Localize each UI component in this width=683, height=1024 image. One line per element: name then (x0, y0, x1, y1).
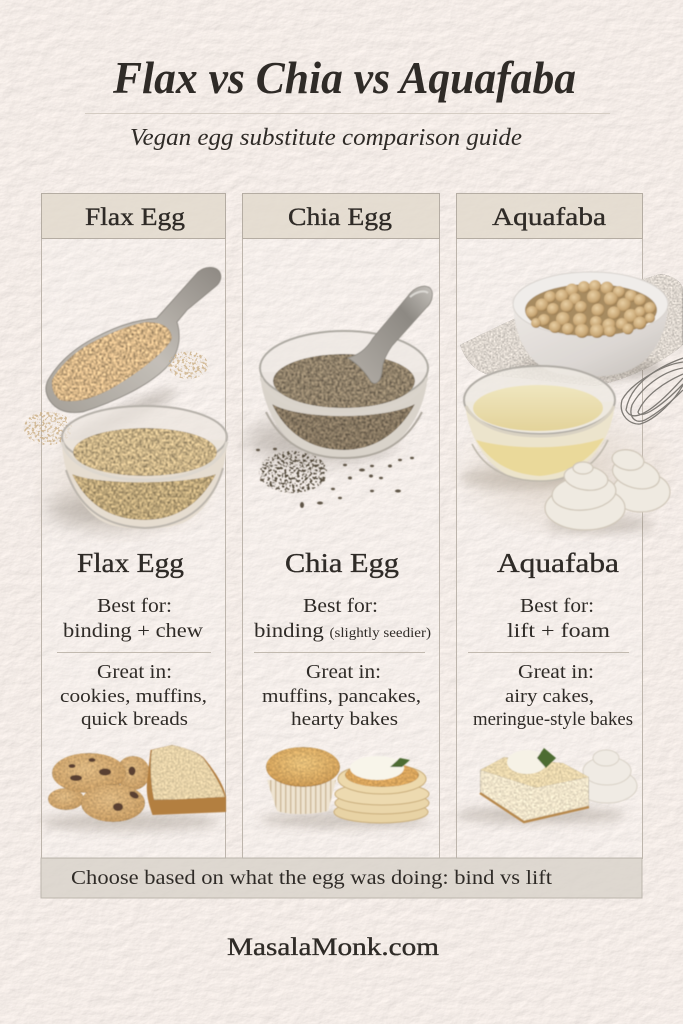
subtitle: Vegan egg substitute comparison guide (130, 125, 522, 151)
icon: glass bowl of chia gel with spoon (260, 286, 432, 458)
chia header bar (242, 194, 440, 238)
chia heading: Chia Egg (285, 548, 399, 578)
chia best for: Best for: (303, 596, 378, 617)
aquafaba header bar: Aquafaba (492, 204, 606, 231)
bottom tip bar: Choose based on what the egg was doing: bind vs lift (71, 868, 553, 889)
aquafaba heading: Aquafaba (497, 548, 619, 578)
floor sand (447, 398, 683, 542)
bottom tip bar (41, 858, 642, 898)
aquafaba great in: Great in: (518, 662, 594, 683)
chia great in: muffins, pancakes, (262, 687, 421, 707)
flax best for: binding + chew (63, 620, 203, 642)
scattered chia seeds (256, 448, 414, 508)
icon: glass bowl of aquafaba (460, 366, 615, 490)
aquafaba best for: Best for: (520, 596, 594, 617)
chia great in (262, 662, 421, 730)
icon: meringues (545, 447, 670, 533)
food: cookies and quick bread (40, 745, 226, 831)
chia great in: Great in: (306, 662, 381, 683)
icon: spoon (348, 286, 432, 383)
flax great in: quick breads (81, 710, 188, 730)
sponge cake (480, 748, 589, 822)
flax header bar: Flax Egg (85, 204, 186, 231)
pancake stack (334, 756, 429, 823)
aquafaba best for: lift + foam (507, 620, 610, 642)
aquafaba great in (473, 662, 633, 730)
website footer: MasalaMonk.com (227, 934, 440, 961)
flax best for: Best for: (97, 596, 172, 617)
meringue (577, 750, 637, 803)
food: sponge cake and meringue (455, 748, 637, 824)
bowl shadow (245, 418, 395, 462)
floor sand and shadow (30, 383, 230, 545)
flax great in (60, 662, 207, 730)
flax best for (63, 596, 203, 642)
panel: aquafaba (447, 194, 683, 858)
chia header bar: Chia Egg (288, 204, 393, 231)
linen towel (460, 274, 683, 386)
scattered flax crumbs (24, 351, 208, 445)
icon: whisk (621, 358, 683, 424)
flax great in: cookies, muffins, (60, 687, 207, 707)
aquafaba header bar (456, 194, 642, 238)
title: Flax vs Chia vs Aquafaba (112, 53, 576, 103)
flax great in: Great in: (97, 662, 172, 683)
chia best for (254, 596, 431, 642)
icon: metal scoop of flax meal (46, 267, 221, 413)
aquafaba great in: airy cakes, (505, 687, 594, 707)
flax header bar (42, 194, 226, 238)
aquafaba best for (507, 596, 610, 642)
muffin (266, 747, 340, 814)
chia great in: hearty bakes (291, 710, 398, 730)
aquafaba great in: meringue-style bakes (473, 710, 633, 730)
icon: white bowl of chickpeas (513, 272, 668, 380)
panel: chia egg (242, 194, 440, 858)
chickpeas (526, 280, 656, 338)
icon: glass bowl of flax gel (62, 406, 227, 529)
chia best for: binding (slightly seedier) (254, 620, 431, 642)
panel: flax egg (24, 194, 230, 858)
flax heading: Flax Egg (77, 548, 184, 578)
food: muffin and pancakes (260, 747, 430, 828)
